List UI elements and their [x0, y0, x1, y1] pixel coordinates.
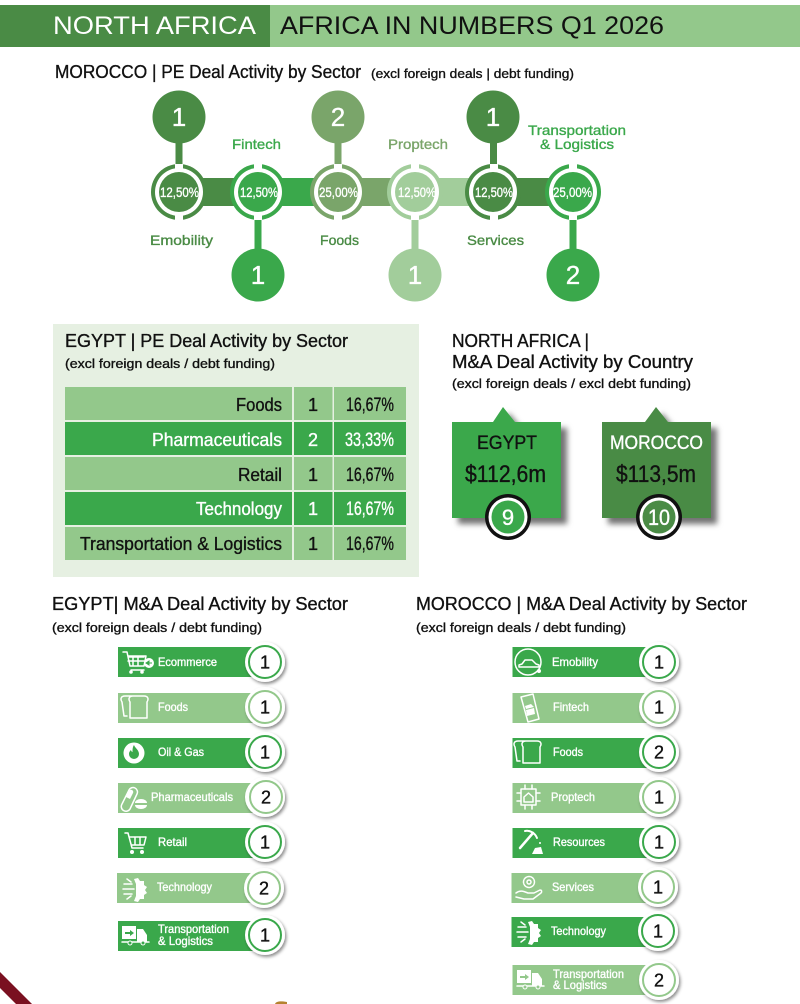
icon: gear circuit	[123, 878, 147, 902]
row: Transportation & Logistics	[118, 915, 285, 955]
table: Egypt PE sectors: 16,67%	[346, 465, 394, 486]
row: Fintech	[512, 687, 679, 727]
row: Technology: 2	[259, 878, 269, 898]
heading: Egypt M&A: (excl foreign deals / debt funding)	[52, 620, 262, 635]
node: Fintech	[230, 136, 286, 302]
row: Proptech	[512, 777, 679, 817]
row: Oil & Gas: 1	[260, 742, 270, 762]
table: Egypt PE sectors: Technology	[196, 499, 282, 519]
node: Services: 1	[486, 102, 500, 132]
header banner: NORTH AFRICA	[53, 12, 256, 40]
cropped footer emblem	[275, 1001, 287, 1004]
row: Retail: 1	[260, 832, 270, 852]
row: Pharmaceuticals: 2	[261, 788, 271, 808]
heading: Egypt PE: (excl foreign deals / debt funding)	[65, 356, 275, 371]
table: Egypt PE sectors: 1	[308, 499, 318, 519]
table: Egypt PE sectors: 33,33%	[345, 430, 394, 451]
row: Ecommerce	[118, 642, 285, 682]
card: Morocco M&A: $113,5m	[616, 461, 696, 488]
icon: gear circuit	[517, 921, 541, 945]
row: Transportation & Logistics: Transportation	[553, 967, 624, 981]
row: Technology: 1	[653, 922, 663, 942]
row: Ecommerce: Ecommerce	[158, 655, 217, 669]
heading: Morocco M&A	[416, 594, 747, 635]
row: Foods: Foods	[553, 745, 583, 759]
row: Foods	[118, 687, 285, 727]
node: Proptech: 1	[408, 260, 422, 290]
heading: Egypt M&A: EGYPT| M&A Deal Activity by Sector	[52, 594, 348, 614]
header banner	[0, 5, 800, 47]
row: Transportation & Logistics: & Logistics	[158, 934, 213, 948]
table: Egypt PE sectors: Pharmaceuticals	[152, 430, 282, 450]
heading: Egypt PE	[65, 331, 348, 371]
card: Morocco M&A: MOROCCO	[610, 433, 703, 454]
node: Foods: Foods	[320, 232, 359, 248]
row: Proptech: Proptech	[551, 790, 595, 804]
row: Fintech: Fintech	[553, 700, 589, 714]
row: Oil & Gas	[118, 732, 285, 772]
node: Services	[465, 90, 524, 248]
row: Retail	[118, 822, 285, 862]
icon: shopping cart	[123, 652, 154, 674]
heading: Morocco M&A: MOROCCO | M&A Deal Activity by Sector	[416, 594, 747, 614]
heading: North Africa M&A by country	[452, 331, 693, 391]
icon: truck	[122, 926, 149, 945]
node: Transportation & Logistics: & Logistics	[540, 136, 614, 152]
row: Emobility	[512, 642, 679, 682]
card: Egypt M&A	[452, 407, 561, 540]
card: Egypt M&A: EGYPT	[477, 433, 537, 454]
node: Transportation & Logistics: Transportation	[528, 122, 626, 138]
table: Egypt PE sectors: 16,67%	[346, 395, 394, 416]
row: Foods: 2	[654, 742, 664, 762]
node: Proptech	[387, 136, 448, 302]
table: Egypt PE sectors: 16,67%	[346, 534, 394, 555]
icon: gear in hand	[516, 876, 542, 899]
icon: pills	[121, 788, 147, 811]
icon: bread	[514, 741, 541, 763]
icon: pickaxe	[520, 831, 543, 854]
row: Proptech: 1	[654, 788, 664, 808]
row: Ecommerce: 1	[260, 652, 270, 672]
row: Fintech: 1	[654, 698, 664, 718]
row: Foods	[512, 732, 679, 772]
card: Morocco M&A	[602, 407, 711, 540]
row: Resources	[512, 822, 679, 862]
row: Foods: 1	[260, 698, 270, 718]
icon: cart	[125, 833, 146, 854]
icon: flame	[124, 742, 144, 764]
table: Egypt PE sectors	[65, 387, 406, 560]
row: Transportation & Logistics: Transportation	[158, 922, 229, 936]
row: Transportation & Logistics: & Logistics	[553, 978, 607, 992]
corner accent stripe	[0, 972, 32, 1004]
node: Transportation & Logistics	[528, 122, 626, 302]
node: Services: 12,50%	[475, 184, 513, 200]
heading: Morocco PE deal activity	[55, 62, 574, 82]
heading: North Africa M&A by country: (excl foreign deals / excl debt funding)	[452, 376, 691, 391]
table: Egypt PE sectors: Retail	[238, 465, 282, 485]
row: Emobility: Emobility	[552, 655, 598, 669]
row: Transportation & Logistics: 1	[260, 926, 270, 946]
timeline chart: Morocco PE sectors	[150, 90, 626, 302]
icon: truck	[517, 970, 544, 989]
icon: phone bank	[521, 694, 539, 722]
heading: North Africa M&A by country: M&A Deal Activity by Country	[452, 352, 693, 372]
node: Emobility	[150, 90, 213, 248]
row: Pharmaceuticals: Pharmaceuticals	[151, 790, 233, 804]
row: Technology	[512, 911, 678, 951]
node: Fintech: 1	[251, 260, 265, 290]
row: Retail: Retail	[158, 835, 187, 849]
row: Resources: Resources	[553, 835, 605, 849]
table: Egypt PE sectors: Transportation & Logistics	[80, 534, 282, 554]
icon: bread	[121, 696, 148, 718]
node: Emobility: 12,50%	[160, 184, 199, 200]
node: Services: Services	[467, 232, 524, 248]
node: Transportation & Logistics: 25,00%	[553, 184, 592, 200]
heading: Morocco PE deal activity: MOROCCO | PE Deal Activity by Sector	[55, 62, 361, 82]
row: Emobility: 1	[654, 652, 664, 672]
list: Morocco M&A sectors	[512, 642, 679, 1000]
table: Egypt PE sectors: 16,67%	[346, 499, 394, 520]
table: Egypt PE sectors: 1	[308, 465, 318, 485]
heading: Egypt PE: EGYPT | PE Deal Activity by Sector	[65, 331, 348, 351]
row: Resources: 1	[654, 832, 664, 852]
row: Transportation & Logistics: 2	[654, 970, 664, 990]
node: Fintech: 12,50%	[240, 184, 278, 200]
node: Foods	[310, 90, 366, 248]
node: Transportation & Logistics: 2	[566, 260, 580, 290]
table: Egypt PE sectors: 2	[308, 430, 318, 450]
heading: Egypt M&A	[52, 594, 348, 635]
row: Foods: Foods	[158, 700, 188, 714]
row: Services	[512, 867, 678, 907]
table: Egypt PE sectors: 1	[308, 534, 318, 554]
heading: Morocco M&A: (excl foreign deals / debt funding)	[416, 620, 626, 635]
node: Proptech: 12,50%	[398, 184, 436, 200]
row: Oil & Gas: Oil & Gas	[158, 745, 204, 759]
table: Egypt PE sectors: Foods	[236, 395, 282, 415]
heading: North Africa M&A by country: NORTH AFRICA |	[452, 331, 589, 351]
node: Proptech: Proptech	[388, 136, 448, 152]
heading: Morocco PE deal activity: (excl foreign deals | debt funding)	[371, 66, 574, 81]
panel: Egypt PE deal activity	[53, 324, 419, 577]
node: Foods: 25,00%	[319, 184, 358, 200]
node: Fintech: Fintech	[232, 136, 281, 152]
row: Technology: Technology	[157, 880, 212, 894]
icon: electric car	[515, 649, 541, 675]
card: Morocco M&A: 10	[648, 505, 670, 530]
row: Transportation & Logistics	[512, 960, 679, 1000]
row: Pharmaceuticals	[118, 777, 285, 817]
list: Egypt M&A sectors	[117, 642, 285, 955]
row: Technology	[117, 868, 284, 908]
row: Services: Services	[552, 880, 594, 894]
row: Technology: Technology	[551, 924, 606, 938]
table: Egypt PE sectors: 1	[308, 395, 318, 415]
icon: house chip	[517, 785, 540, 809]
card: Egypt M&A: 9	[502, 505, 514, 530]
card: Egypt M&A: $112,6m	[465, 461, 546, 488]
node: Emobility: 1	[172, 102, 186, 132]
header banner: AFRICA IN NUMBERS Q1 2026	[280, 12, 664, 40]
node: Foods: 2	[331, 102, 345, 132]
node: Emobility: Emobility	[150, 232, 213, 248]
row: Services: 1	[653, 878, 663, 898]
